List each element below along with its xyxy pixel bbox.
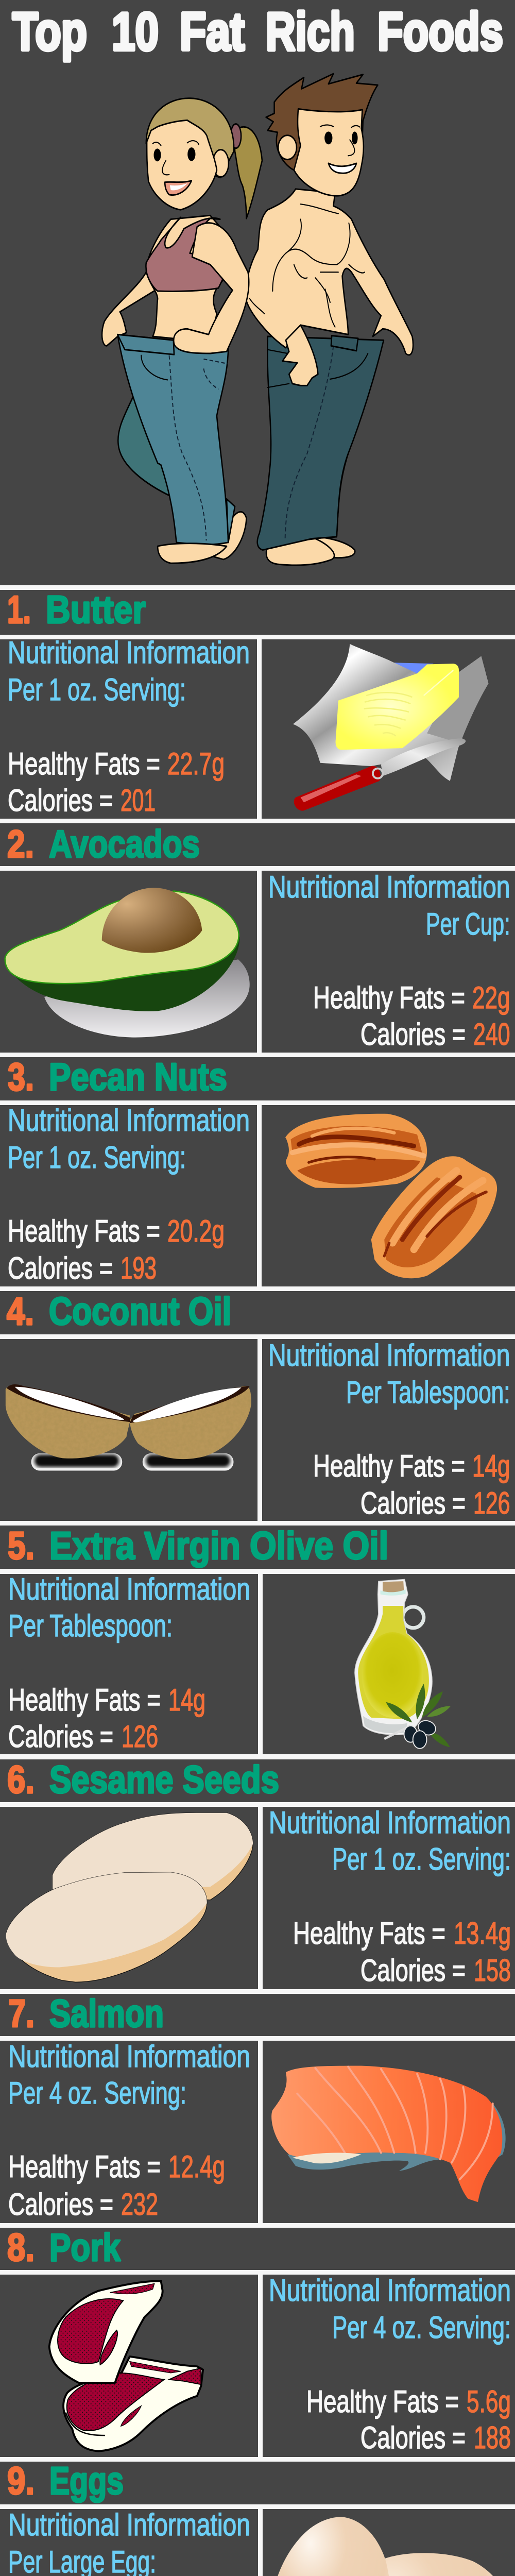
text: nutritional information: Calories =: [8, 1251, 113, 1285]
title: [12, 2, 503, 62]
text: nutritional information: Calories =: [360, 1017, 466, 1052]
heading: 9. Eggs: 9.: [7, 2459, 35, 2502]
text: nutritional information: Nutritional Information: [8, 2507, 250, 2542]
text: nutritional information: Healthy Fats =: [313, 980, 465, 1015]
figure: woman: [102, 98, 262, 563]
panel: 2 avocados: [5, 822, 510, 1052]
text: nutritional information: [8, 635, 250, 818]
heading: 1. Butter: [7, 588, 146, 631]
text: nutritional information: Per 1 oz. Serving:: [8, 672, 186, 707]
text: nutritional information: Calories =: [360, 2420, 466, 2455]
text: nutritional information: Nutritional Information: [8, 1103, 250, 1138]
text: nutritional information: 126: [122, 1719, 158, 1754]
heading: 2. Avocados: 2.: [7, 822, 34, 866]
heading: 9. Eggs: Eggs: [49, 2459, 124, 2502]
icon: pecans: [285, 1114, 497, 1278]
text: nutritional information: Healthy Fats =: [8, 1214, 160, 1248]
panel: 9 eggs: [7, 2459, 508, 2576]
icon: pork chops: [49, 2281, 203, 2451]
text: nutritional information: [268, 1338, 510, 1520]
heading: 5. Extra Virgin Olive Oil: 5.: [8, 1524, 35, 1567]
text: nutritional information: 201: [121, 783, 156, 818]
heading: 7. Salmon: [8, 1992, 164, 2035]
text: nutritional information: Healthy Fats =: [8, 1683, 161, 1717]
icon: salmon fillet: [271, 2066, 506, 2202]
text: nutritional information: Calories =: [8, 2187, 113, 2222]
heading: 2. Avocados: Avocados: [49, 822, 200, 866]
text: nutritional information: Nutritional Information: [8, 2039, 250, 2074]
heading: 4. Coconut Oil: [7, 1290, 231, 1333]
heading: 8. Pork: 8.: [7, 2226, 35, 2269]
panel: 8 pork: [7, 2226, 511, 2455]
pork chop: lower: [63, 2357, 203, 2451]
text: nutritional information: 193: [121, 1251, 157, 1285]
heading: 7. Salmon: 7.: [8, 1992, 35, 2035]
heading: 4. Coconut Oil: 4.: [7, 1290, 34, 1333]
text: nutritional information: Healthy Fats =: [293, 1916, 445, 1951]
heading: 1. Butter: Butter: [46, 588, 146, 631]
icon: coconut halves: [6, 1384, 251, 1471]
heading: 3. Pecan Nuts: Pecan Nuts: [49, 1055, 227, 1098]
text: nutritional information: [8, 1572, 250, 1754]
heading: 9. Eggs: [7, 2459, 124, 2502]
title: Rich: [266, 2, 355, 62]
icon: sesame seeds: [6, 1813, 253, 1982]
icon: butter on foil with knife: [293, 644, 488, 811]
icon: olive oil bottle with olives: [355, 1579, 451, 1749]
text: nutritional information: 20.2g: [167, 1214, 225, 1248]
text: nutritional information: Calories =: [360, 1953, 466, 1988]
heading: 5. Extra Virgin Olive Oil: Extra Virgin Olive Oil: [49, 1524, 388, 1567]
text: nutritional information: 14g: [168, 1683, 205, 1717]
text: nutritional information: Calories =: [360, 1486, 466, 1520]
text: nutritional information: Healthy Fats =: [313, 1449, 465, 1483]
heading: 2. Avocados: [7, 822, 200, 866]
heading: 8. Pork: Pork: [49, 2226, 121, 2269]
text: nutritional information: Nutritional Information: [8, 1572, 250, 1606]
illustration: couple in oversized jeans: [102, 74, 413, 565]
text: nutritional information: [8, 2039, 250, 2222]
text: nutritional information: Per Tablespoon:: [8, 1608, 173, 1643]
text: nutritional information: [268, 870, 510, 1052]
title: Fat: [180, 2, 245, 62]
text: nutritional information: Healthy Fats =: [306, 2384, 459, 2419]
panel: 4 coconut oil: [6, 1290, 510, 1520]
text: nutritional information: [269, 1805, 511, 1988]
heading: 7. Salmon: Salmon: [49, 1992, 164, 2035]
panel: 5 extra virgin olive oil: [8, 1524, 451, 1754]
text: nutritional information: [8, 1103, 250, 1285]
panel: 3 pecan nuts: [8, 1055, 497, 1285]
text: nutritional information: Calories =: [8, 1719, 113, 1754]
title: Top: [12, 2, 87, 62]
heading: 1. Butter: 1.: [7, 588, 31, 631]
heading: 3. Pecan Nuts: 3.: [8, 1055, 34, 1098]
text: nutritional information: Per 4 oz. Serving:: [8, 2076, 186, 2110]
text: nutritional information: 12.4g: [168, 2149, 225, 2184]
icon: eggs: [271, 2517, 508, 2576]
heading: 4. Coconut Oil: Coconut Oil: [49, 1290, 231, 1333]
text: nutritional information: Healthy Fats =: [8, 2149, 161, 2184]
heading: 6. Sesame Seeds: 6.: [7, 1758, 35, 1801]
heading: 8. Pork: [7, 2226, 121, 2269]
text: nutritional information: Nutritional Information: [8, 635, 250, 670]
title: 10: [112, 2, 159, 62]
figure: man: [246, 74, 413, 565]
text: nutritional information: [8, 2507, 250, 2576]
pork chop: upper: [49, 2281, 163, 2383]
text: nutritional information: 232: [121, 2187, 158, 2222]
text: nutritional information: Per 1 oz. Serving:: [8, 1140, 186, 1175]
icon: avocado half: [5, 888, 250, 1038]
panel: 7 salmon: [8, 1992, 506, 2222]
panel: 1 butter: [7, 588, 488, 818]
panel: 6 sesame seeds: [6, 1758, 511, 1988]
text: nutritional information: 22.7g: [167, 747, 225, 781]
heading: 6. Sesame Seeds: Sesame Seeds: [49, 1758, 279, 1801]
text: nutritional information: Healthy Fats =: [8, 747, 160, 781]
text: nutritional information: [269, 2273, 511, 2455]
text: nutritional information: Calories =: [8, 783, 113, 818]
